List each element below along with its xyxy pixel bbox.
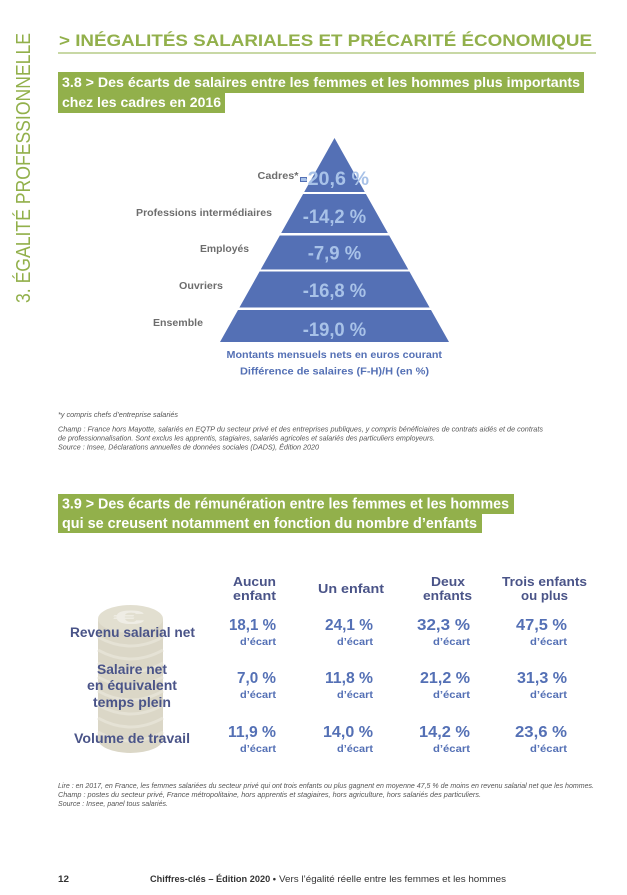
row: Salaire net en équivalent temps plein: 11,8 % <box>325 670 373 687</box>
row: Salaire net en équivalent temps plein: d’écart <box>240 690 277 701</box>
row: Volume de travail: 11,9 % <box>228 724 276 741</box>
footer <box>58 874 506 885</box>
row: Revenu salarial net: d’écart <box>240 637 277 648</box>
heading 3.8: 3.8 > Des écarts de salaires entre les femmes et les hommes plus importants <box>62 74 580 90</box>
footer: Chiffres-clés – Édition 2020 • <box>150 874 277 885</box>
row: Salaire net en équivalent temps plein: 21,2 % <box>420 670 470 687</box>
table column headers: Trois enfants <box>502 574 587 589</box>
row: Revenu salarial net: 47,5 % <box>516 617 567 634</box>
level: Professions intermédiaires: Professions intermédiaires <box>136 208 272 219</box>
row: Salaire net en équivalent temps plein: temps plein <box>93 695 171 710</box>
row: Volume de travail <box>74 724 568 755</box>
level: Employés: Employés <box>200 244 249 255</box>
heading 3.8: chez les cadres en 2016 <box>62 94 221 110</box>
table column headers: Un enfant <box>318 581 385 596</box>
level: Cadres <box>258 138 369 192</box>
heading 3.9: 3.9 > Des écarts de rémunération entre les femmes et les hommes <box>62 496 509 512</box>
level: Ensemble: Ensemble <box>153 318 203 329</box>
notes 3.9: Lire : en 2017, en France, les femmes salariées du secteur privé qui ont trois enfants ou plus gagnent en moyenne 47,5 % de moins en revenu salarial net que les hommes. <box>58 783 594 790</box>
level: Professions intermédiaires <box>136 194 388 233</box>
heading 3.9 <box>58 494 514 533</box>
level: Ouvriers: -16,8 % <box>303 281 366 302</box>
notes 3.9: Source : Insee, panel tous salariés. <box>58 801 168 808</box>
notes 3.9 <box>58 783 594 808</box>
pyramid caption: Différence de salaires (F-H)/H (en %) <box>240 366 429 378</box>
row: Volume de travail: 14,0 % <box>323 724 373 741</box>
table column headers: Aucun <box>233 574 276 589</box>
row: Revenu salarial net: 18,1 % <box>229 617 276 634</box>
row: Volume de travail: d’écart <box>530 744 568 755</box>
footer: 12 <box>58 874 69 885</box>
level: Ensemble <box>153 310 449 342</box>
row: Volume de travail: d’écart <box>337 744 374 755</box>
notes 3.8: *y compris chefs d’entreprise salariés <box>58 412 179 419</box>
heading 3.9: qui se creusent notamment en fonction du nombre d’enfants <box>62 516 477 532</box>
row: Salaire net en équivalent temps plein: Salaire net <box>97 662 168 677</box>
icon: coin stack <box>98 605 163 753</box>
page heading: > INÉGALITÉS SALARIALES ET PRÉCARITÉ ÉCONOMIQUE <box>59 31 592 50</box>
table column headers: ou plus <box>521 588 568 603</box>
table column headers: enfant <box>233 588 277 603</box>
level: Employés <box>200 236 408 270</box>
level: Cadres: Cadres* <box>258 171 299 182</box>
table column headers: enfants <box>423 588 472 603</box>
row: Volume de travail: d’écart <box>240 744 277 755</box>
level: Ouvriers <box>179 272 430 308</box>
icon: coin stack: € <box>113 608 146 629</box>
row: Revenu salarial net: d’écart <box>433 637 471 648</box>
level: Employés: -7,9 % <box>308 244 361 264</box>
row: Revenu salarial net: 24,1 % <box>325 617 373 634</box>
pyramid caption: Montants mensuels nets en euros courant <box>226 349 442 361</box>
row: Revenu salarial net: d’écart <box>337 637 374 648</box>
table column headers <box>233 574 587 603</box>
row: Revenu salarial net: d’écart <box>530 637 568 648</box>
pyramid chart <box>136 138 449 342</box>
notes 3.8: Source : Insee, Déclarations annuelles de données sociales (DADS), Édition 2020 <box>58 442 319 452</box>
pyramid caption <box>226 349 442 378</box>
footer: Vers l’égalité réelle entre les femmes et les hommes <box>279 874 506 885</box>
row: Salaire net en équivalent temps plein: d’écart <box>530 690 568 701</box>
notes 3.9: Champ : postes du secteur privé, France métropolitaine, hors apprentis et stagiaires, hors agriculture, hors salariés des particuliers. <box>58 792 481 799</box>
row: Salaire net en équivalent temps plein: en équivalent <box>87 678 178 693</box>
row: Volume de travail: 23,6 % <box>515 724 567 741</box>
notes 3.8: de professionnalisation. Sont exclus les apprentis, stagiaires, salariés agricoles et salariés des particuliers employeurs. <box>58 436 435 442</box>
level: Ouvriers: Ouvriers <box>179 281 223 292</box>
notes 3.8 <box>58 412 544 452</box>
notes 3.8: Champ : France hors Mayotte, salariés en EQTP du secteur privé et des entreprises publiques, y compris bénéficiaires de contrats aidés et de contrats <box>58 426 544 434</box>
row: Revenu salarial net: Revenu salarial net <box>70 625 196 640</box>
row: Salaire net en équivalent temps plein: d’écart <box>337 690 374 701</box>
level: Professions intermédiaires: -14,2 % <box>303 207 366 228</box>
heading 3.8 <box>58 72 584 113</box>
level: Cadres: -20,6 % <box>301 169 369 190</box>
row: Salaire net en équivalent temps plein: 31,3 % <box>517 670 567 687</box>
row: Volume de travail: Volume de travail <box>74 731 190 746</box>
level: Ensemble: -19,0 % <box>303 320 366 341</box>
row: Salaire net en équivalent temps plein: 7,0 % <box>237 670 276 687</box>
row: Revenu salarial net: 32,3 % <box>417 617 470 634</box>
row: Volume de travail: 14,2 % <box>419 724 470 741</box>
table column headers: Deux <box>431 574 466 589</box>
row: Salaire net en équivalent temps plein <box>87 662 568 710</box>
vertical chapter title: 3. ÉGALITÉ PROFESSIONNELLE <box>12 33 35 303</box>
row: Revenu salarial net <box>70 617 568 648</box>
row: Volume de travail: d’écart <box>433 744 471 755</box>
row: Salaire net en équivalent temps plein: d’écart <box>433 690 471 701</box>
